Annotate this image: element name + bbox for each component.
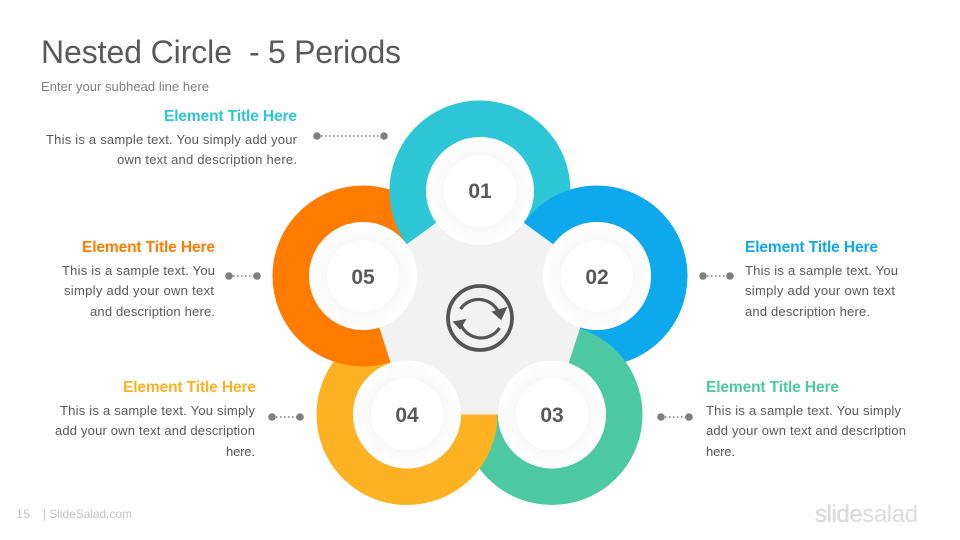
text block 04: Element Title Here [123,379,256,396]
node 02 [543,222,651,330]
text block 04: add your own text and description [55,423,255,438]
footer site name: | SlideSalad.com [43,507,132,521]
text block 02: simply add your own text [745,283,895,298]
text block 01: own text and description here. [117,152,297,167]
icon: refresh cycle [448,286,512,350]
node 03: 03 [540,404,564,427]
node 03 [498,360,606,468]
text block 04: This is a sample text. You simply [60,403,256,418]
text block 01: This is a sample text. You simply add your [46,132,298,147]
text block 03: here. [706,444,735,459]
text block 01 [46,108,298,167]
node 05 [309,222,417,330]
text block 02: and description here. [745,304,870,319]
connector 01 [313,132,388,140]
connector 05 [225,272,261,280]
text block 04: here. [226,444,255,459]
text block 05: simply add your own text [64,283,214,298]
text block 05: This is a sample text. You [62,263,215,278]
title: Nested Circle [41,34,232,70]
footer logo: slidesalad [815,501,918,528]
central pentagon [363,191,597,414]
ring 01 left overlap over orange [390,100,480,244]
node 01: 01 [468,180,492,203]
ring 04 yellow [335,342,479,487]
text block 02: This is a sample text. You [745,263,898,278]
title: - 5 Periods [249,34,401,70]
node 04: 04 [395,404,419,427]
ring 02 blue [525,204,669,348]
text block 05: Element Title Here [82,239,215,256]
node 05: 05 [351,266,375,289]
text block 02: Element Title Here [745,239,878,256]
ring 03 green [480,342,624,487]
text block 03: Element Title Here [706,379,839,396]
connector 04 [268,413,304,421]
ring 05 orange [291,204,435,348]
ring 01 teal [408,119,552,263]
text block 03 [706,379,906,459]
text block 01: Element Title Here [164,108,297,125]
text block 03: add your own text and description [706,423,906,438]
footer page number: 15 [16,507,30,521]
connector 02 [699,272,734,280]
text block 03: This is a sample text. You simply [706,403,902,418]
connector 03 [657,413,693,421]
nested circle diagram [291,119,669,487]
title [41,34,401,70]
text block 05: and description here. [90,304,215,319]
node 02: 02 [585,266,609,289]
node 01 [426,137,534,245]
node 04 [353,360,461,468]
text block 05 [62,239,215,319]
text block 02 [745,239,898,319]
subhead: Enter your subhead line here [41,79,209,94]
text block 04 [55,379,256,459]
